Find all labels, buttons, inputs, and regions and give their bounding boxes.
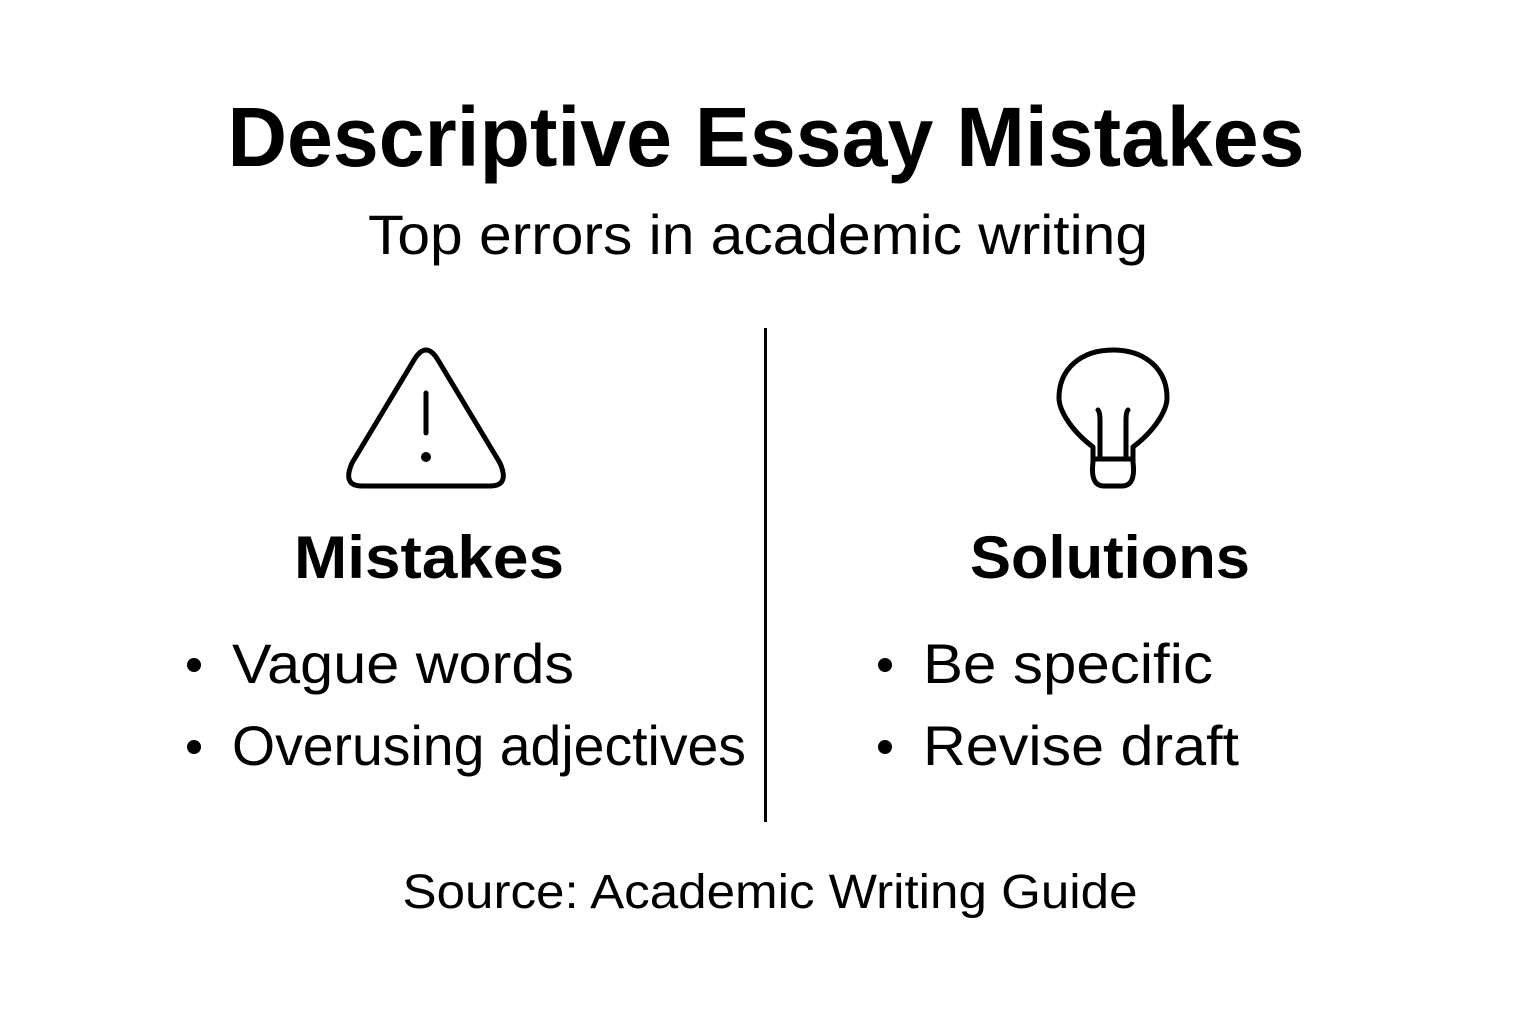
bullet list: mistakes: Overusing adjectives: [232, 714, 746, 777]
divider: [764, 328, 767, 822]
panel: solutions: [878, 350, 1250, 777]
subtitle: Top errors in academic writing: [368, 203, 1148, 266]
bullet list: solutions: [878, 632, 1239, 777]
icon: light bulb: [1059, 350, 1167, 486]
bullet list: solutions: Revise draft: [923, 714, 1239, 777]
bullet list: solutions: Be specific: [923, 632, 1213, 695]
panel: mistakes: [187, 350, 746, 777]
bullet list: mistakes: Vague words: [232, 632, 574, 695]
heading: mistakes: Mistakes: [294, 524, 564, 591]
icon: warning triangle: [349, 350, 503, 486]
heading: solutions: Solutions: [970, 524, 1250, 591]
source note: Source: Academic Writing Guide: [402, 866, 1138, 919]
bullet list: mistakes: [187, 632, 746, 777]
title: Descriptive Essay Mistakes: [228, 90, 1304, 184]
